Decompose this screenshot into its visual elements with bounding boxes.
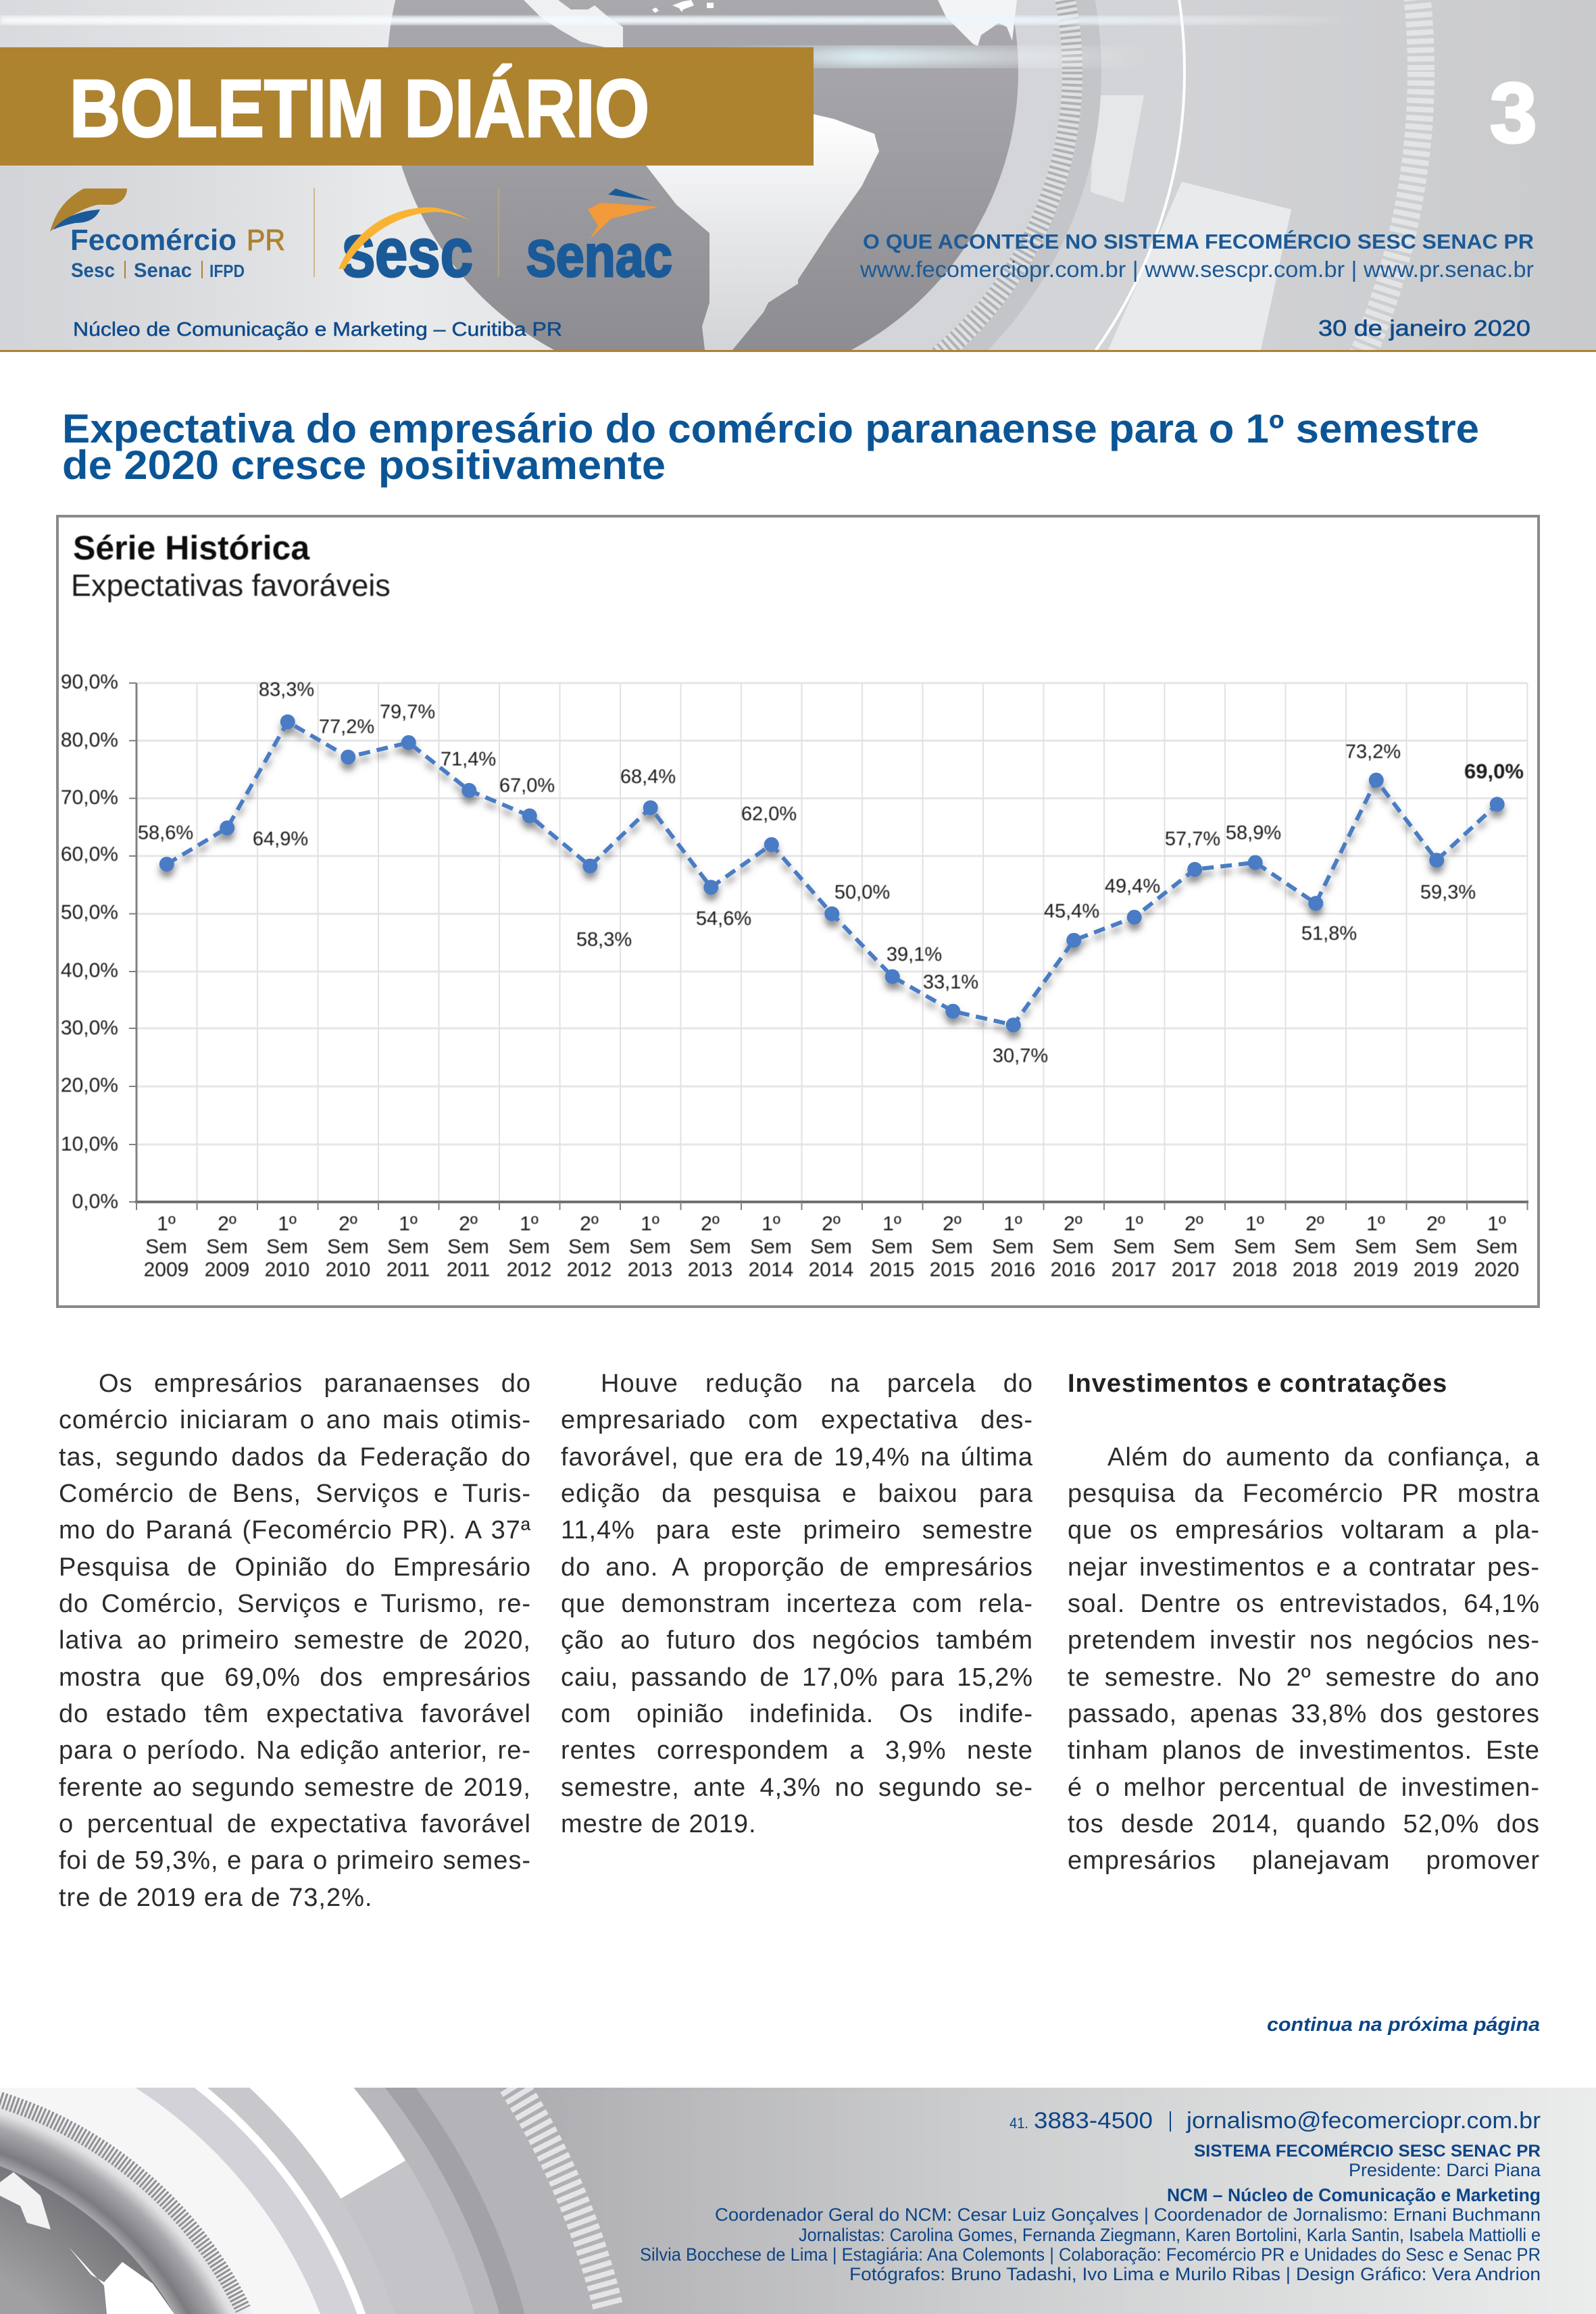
text column 1: o percentual de expectativa favorável <box>59 1810 531 1838</box>
organisation tagline: O QUE ACONTECE NO SISTEMA FECOMÉRCIO SESC SENAC PR <box>863 230 1534 253</box>
x axis labels: 2º <box>1426 1213 1445 1235</box>
x axis labels: 1º <box>882 1213 901 1235</box>
y axis labels: 10,0% <box>61 1133 118 1155</box>
text column 2: rentes correspondem a 3,9% neste <box>561 1736 1033 1765</box>
x axis labels: 2º <box>701 1213 720 1235</box>
x axis labels: 2º <box>459 1213 478 1235</box>
grid <box>136 683 1527 1202</box>
x axis labels: Sem <box>1355 1236 1397 1258</box>
x axis labels: Sem <box>568 1236 610 1258</box>
text column 3: soal. Dentre os entrevistados, 64,1% <box>1068 1590 1540 1618</box>
x axis labels: 2º <box>943 1213 962 1235</box>
x axis labels: Sem <box>1052 1236 1094 1258</box>
x axis labels: 2009 <box>144 1259 189 1281</box>
text column 3: Investimentos e contratações <box>1068 1369 1447 1398</box>
x axis labels: 2014 <box>809 1259 853 1281</box>
data labels: 67,0% <box>499 775 555 797</box>
data labels: 58,6% <box>138 822 193 844</box>
y axis labels: 50,0% <box>61 901 118 924</box>
date: 30 de janeiro 2020 <box>1318 316 1530 341</box>
data labels: 79,7% <box>380 701 435 723</box>
credits: Silvia Bocchese de Lima | Estagiária: Ana Colemonts | Colaboração: Fecomércio PR e Unidades do Sesc e Senac PR <box>640 2244 1541 2265</box>
x axis labels: 2018 <box>1232 1259 1277 1281</box>
text column 2: caiu, passando de 17,0% para 15,2% <box>561 1663 1033 1692</box>
header banner <box>0 0 1596 352</box>
data labels: 64,9% <box>253 828 308 850</box>
x axis labels: Sem <box>206 1236 248 1258</box>
x axis labels: Sem <box>1113 1236 1155 1258</box>
data labels: 58,9% <box>1226 822 1281 844</box>
text column 3: Além do aumento da confiança, a <box>1107 1443 1540 1472</box>
x axis labels: Sem <box>1234 1236 1276 1258</box>
text column 3: pretendem investir nos negócios nes- <box>1068 1626 1540 1655</box>
text column 3: tos desde 2014, quando 52,0% dos <box>1068 1810 1540 1838</box>
x axis labels: Sem <box>750 1236 792 1258</box>
y axis labels: 60,0% <box>61 843 118 865</box>
x axis labels: Sem <box>1173 1236 1215 1258</box>
x axis labels: 2017 <box>1172 1259 1216 1281</box>
credits: NCM – Núcleo de Comunicação e Marketing <box>1167 2185 1541 2205</box>
x axis labels: 2019 <box>1353 1259 1398 1281</box>
x axis labels: 2011 <box>386 1259 430 1281</box>
x axis labels: 1º <box>520 1213 539 1235</box>
y axis labels: 70,0% <box>61 786 118 809</box>
text column 3: empresários planejavam promover <box>1068 1846 1540 1875</box>
x axis labels: 1º <box>278 1213 297 1235</box>
x axis labels: 2º <box>218 1213 236 1235</box>
data labels: 51,8% <box>1301 923 1357 945</box>
text column 2: 11,4% para este primeiro semestre <box>561 1516 1033 1544</box>
credits: Coordenador Geral do NCM: Cesar Luiz Gonçalves | Coordenador de Jornalismo: Ernani Buchmann <box>715 2205 1541 2225</box>
line chart panel: Série Histórica <box>56 515 1540 1308</box>
x axis labels: Sem <box>145 1236 187 1258</box>
title bar <box>0 47 814 166</box>
x axis labels: 2014 <box>749 1259 793 1281</box>
x axis labels: Sem <box>508 1236 550 1258</box>
x axis labels: 1º <box>1245 1213 1264 1235</box>
y axis labels: 0,0% <box>72 1190 118 1213</box>
x axis labels: Sem <box>1415 1236 1457 1258</box>
x axis labels: 1º <box>641 1213 659 1235</box>
x axis labels: 2020 <box>1474 1259 1519 1281</box>
data labels: 73,2% <box>1345 741 1401 763</box>
logo: Fecomércio PR: IFPD <box>209 261 245 281</box>
x axis labels: Sem <box>992 1236 1034 1258</box>
department line: Núcleo de Comunicação e Marketing – Curitiba PR <box>73 319 562 341</box>
x axis labels: Sem <box>871 1236 913 1258</box>
continued-on-next-page note: continua na próxima página <box>1267 2014 1540 2036</box>
data labels: 77,2% <box>319 716 374 738</box>
credits <box>640 2141 1541 2284</box>
y axis labels: 40,0% <box>61 959 118 982</box>
logo: Fecomércio PR <box>50 188 285 282</box>
logo: Fecomércio PR: Senac <box>134 259 192 282</box>
data labels: 62,0% <box>741 803 797 825</box>
x axis labels: 2º <box>822 1213 841 1235</box>
x axis labels: Sem <box>266 1236 308 1258</box>
text column 1: foi de 59,3%, e para o primeiro semes- <box>59 1846 531 1875</box>
text column 1: do estado têm expectativa favorável <box>59 1700 531 1728</box>
text column 2: que demonstram incerteza com rela- <box>561 1590 1033 1618</box>
y axis labels: 30,0% <box>61 1017 118 1039</box>
data labels: 49,4% <box>1105 876 1160 897</box>
credits: Jornalistas: Carolina Gomes, Fernanda Ziegmann, Karen Bortolini, Karla Santin, Isabela Mattiolli e <box>799 2225 1541 2245</box>
x axis labels: Sem <box>629 1236 671 1258</box>
data labels: 54,6% <box>696 908 751 930</box>
title bar: BOLETIM DIÁRIO <box>70 62 649 154</box>
text column 2: com opinião indefinida. Os indife- <box>561 1700 1033 1728</box>
white panel <box>249 2088 405 2199</box>
text column 1: lativa ao primeiro semestre de 2020, <box>59 1626 531 1655</box>
x axis labels: Sem <box>810 1236 852 1258</box>
x axis labels: 2010 <box>326 1259 370 1281</box>
x axis labels: 1º <box>1124 1213 1143 1235</box>
text column 1: para o período. Na edição anterior, re- <box>59 1736 531 1765</box>
x axis labels: 2018 <box>1293 1259 1337 1281</box>
x axis labels: 1º <box>399 1213 418 1235</box>
credits: SISTEMA FECOMÉRCIO SESC SENAC PR <box>1194 2141 1541 2161</box>
text column 3: pesquisa da Fecomércio PR mostra <box>1068 1480 1540 1508</box>
light panels <box>1108 182 1291 350</box>
text column 3: te semestre. No 2º semestre do ano <box>1068 1663 1540 1692</box>
chart title: Série Histórica <box>73 529 310 567</box>
x axis labels: 2016 <box>1051 1259 1095 1281</box>
x axis labels: Sem <box>327 1236 369 1258</box>
x axis labels <box>144 1213 1519 1281</box>
x axis labels: Sem <box>387 1236 429 1258</box>
data labels: 71,4% <box>441 749 496 770</box>
x axis labels: 2009 <box>205 1259 249 1281</box>
text column 2: favorável, que era de 19,4% na última <box>561 1443 1033 1472</box>
x axis labels: 2º <box>1064 1213 1082 1235</box>
text column 2: empresariado com expectativa des- <box>561 1406 1033 1434</box>
data labels: 83,3% <box>259 679 314 701</box>
article headline: de 2020 cresce positivamente <box>62 443 666 488</box>
contact line: jornalismo@fecomerciopr.com.br <box>1186 2108 1541 2134</box>
x axis labels: 1º <box>762 1213 780 1235</box>
x axis labels: 2016 <box>991 1259 1035 1281</box>
text column 1: Comércio de Bens, Serviços e Turis- <box>59 1480 531 1508</box>
article headline: Expectativa do empresário do comércio paranaense para o 1º semestre <box>62 406 1479 451</box>
x axis labels: Sem <box>931 1236 973 1258</box>
lens flare <box>0 16 1473 24</box>
x axis labels: Sem <box>447 1236 489 1258</box>
gold rule <box>0 350 1596 352</box>
data labels: 57,7% <box>1165 828 1220 850</box>
x axis labels: 1º <box>157 1213 176 1235</box>
globe <box>387 0 1018 387</box>
x axis labels: 2019 <box>1414 1259 1458 1281</box>
x axis labels: 2º <box>1184 1213 1203 1235</box>
text column 3 <box>1068 1369 1540 1875</box>
data labels: 68,4% <box>620 766 676 788</box>
chart subtitle: Expectativas favoráveis <box>71 568 391 603</box>
text column 2 <box>561 1369 1033 1838</box>
article headline <box>62 406 1479 488</box>
logo: Fecomércio PR: Fecomércio <box>70 224 236 257</box>
text column 2: semestre, ante 4,3% no segundo se- <box>561 1774 1033 1802</box>
globe <box>0 2166 174 2314</box>
x axis labels: Sem <box>689 1236 731 1258</box>
x axis labels: 2015 <box>870 1259 914 1281</box>
data labels: 58,3% <box>576 929 632 951</box>
axes <box>129 683 1528 1210</box>
text column 2: Houve redução na parcela do <box>601 1369 1033 1398</box>
logo: Fecomércio PR: Sesc <box>71 259 115 282</box>
data labels: 39,1% <box>887 944 942 965</box>
continents <box>646 114 879 350</box>
x axis labels: Sem <box>1294 1236 1336 1258</box>
x axis labels: 2012 <box>507 1259 551 1281</box>
data labels: 30,7% <box>993 1045 1048 1067</box>
data labels: 50,0% <box>834 882 890 903</box>
text column 1: Os empresários paranaenses do <box>99 1369 531 1398</box>
x axis labels: 2010 <box>265 1259 309 1281</box>
x axis labels: 2012 <box>567 1259 612 1281</box>
websites: www.fecomerciopr.com.br | www.sescpr.com.br | www.pr.senac.br <box>859 257 1534 282</box>
text column 3: é o melhor percentual de investimen- <box>1068 1774 1540 1802</box>
text column 1: ferente ao segundo semestre de 2019, <box>59 1774 531 1802</box>
text column 1: tre de 2019 era de 73,2%. <box>59 1884 372 1912</box>
credits: Fotógrafos: Bruno Tadashi, Ivo Lima e Murilo Ribas | Design Gráfico: Vera Andrion <box>849 2264 1541 2284</box>
text column 1: Pesquisa de Opinião do Empresário <box>59 1553 531 1582</box>
data labels: 69,0% <box>1464 759 1524 783</box>
logo: Fecomércio PR: PR <box>247 224 285 257</box>
text column 3: passado, apenas 33,8% dos gestores <box>1068 1700 1540 1728</box>
y axis labels: 20,0% <box>61 1074 118 1097</box>
logo: Sesc: Sesc <box>342 214 473 291</box>
y axis labels: 80,0% <box>61 729 118 751</box>
x axis labels: 2013 <box>688 1259 732 1281</box>
text column 2: do ano. A proporção de empresários <box>561 1553 1033 1582</box>
x axis labels: Sem <box>1476 1236 1518 1258</box>
y axis labels <box>61 671 118 1213</box>
text column 3: que os empresários voltaram a pla- <box>1068 1516 1540 1544</box>
text column 3: tinham planos de investimentos. Este <box>1068 1736 1540 1765</box>
text column 1: do Comércio, Serviços e Turismo, re- <box>59 1590 531 1618</box>
data labels: 59,3% <box>1420 882 1476 903</box>
text column 1: mostra que 69,0% dos empresários <box>59 1663 531 1692</box>
contact line: 41. <box>1009 2115 1028 2132</box>
logo: Senac: Senac <box>526 222 672 289</box>
x axis labels: 2º <box>1305 1213 1324 1235</box>
x axis labels: 1º <box>1487 1213 1506 1235</box>
data labels: 45,4% <box>1044 901 1099 922</box>
text column 1: mo do Paraná (Fecomércio PR). A 37ª <box>59 1516 531 1544</box>
logo: Senac <box>526 188 672 289</box>
x axis labels: 2013 <box>628 1259 672 1281</box>
text column 1: tas, segundo dados da Federação do <box>59 1443 531 1472</box>
footer <box>0 2088 1596 2314</box>
text column 3: nejar investimentos e a contratar pes- <box>1068 1553 1540 1582</box>
x axis labels: 2º <box>339 1213 357 1235</box>
text column 2: ção ao futuro dos negócios também <box>561 1626 1033 1655</box>
text column 2: mestre de 2019. <box>561 1810 757 1838</box>
y axis labels: 90,0% <box>61 671 118 693</box>
x axis labels: 2017 <box>1112 1259 1156 1281</box>
x axis labels: 2011 <box>447 1259 490 1281</box>
x axis labels: 1º <box>1003 1213 1022 1235</box>
x axis labels: 2015 <box>930 1259 974 1281</box>
x axis labels: 2º <box>580 1213 599 1235</box>
data series: favourable expectations <box>159 714 1505 1032</box>
text column 1: comércio iniciaram o ano mais otimis- <box>59 1406 531 1434</box>
contact line <box>1009 2108 1541 2134</box>
data labels <box>138 679 1524 1067</box>
credits: Presidente: Darci Piana <box>1349 2160 1541 2180</box>
page number: 3 <box>1490 66 1537 160</box>
chart frame <box>57 516 1539 1307</box>
text column 1 <box>59 1369 531 1912</box>
x axis labels: 1º <box>1366 1213 1385 1235</box>
data labels: 33,1% <box>923 972 978 993</box>
contact line: 3883-4500 <box>1034 2108 1153 2134</box>
text column 2: edição da pesquisa e baixou para <box>561 1480 1033 1508</box>
